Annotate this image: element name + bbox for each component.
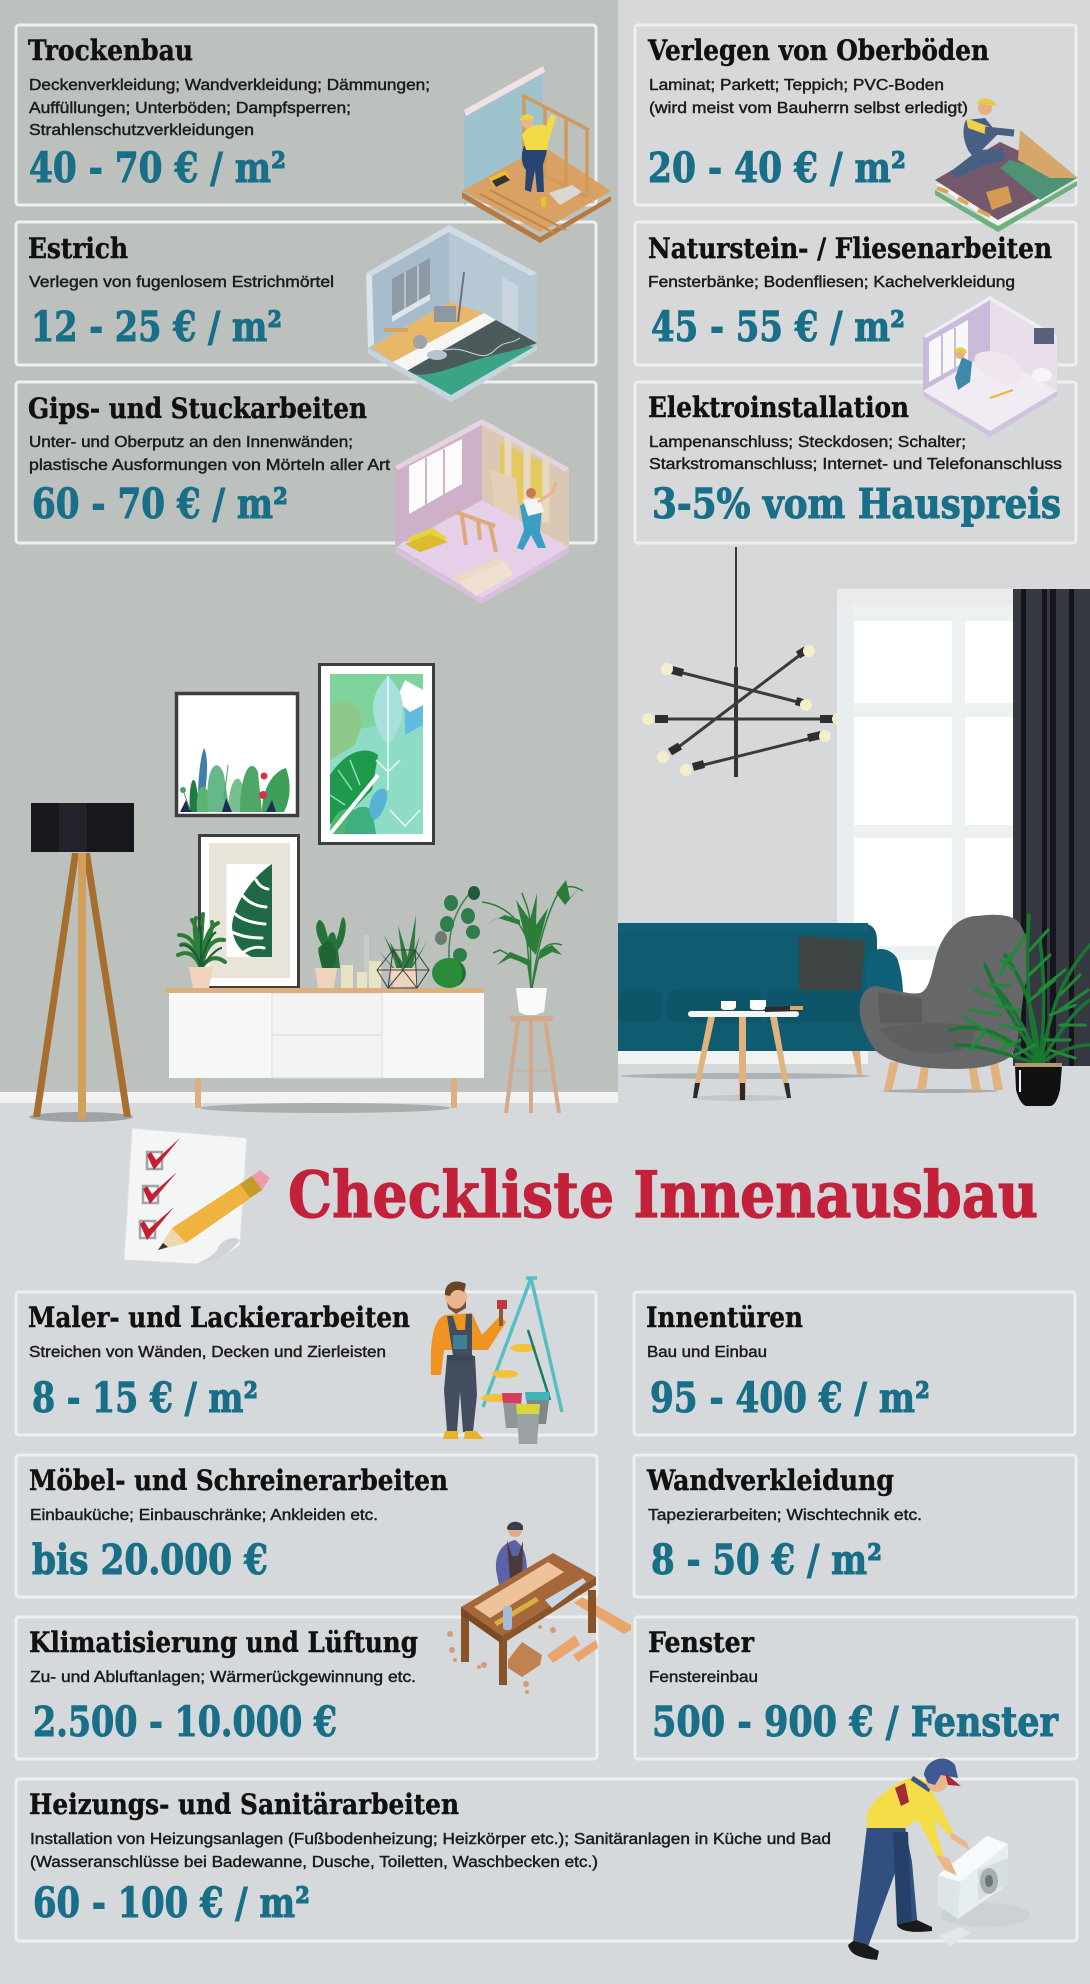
description <box>29 77 430 139</box>
heading: Trockenbau <box>28 34 193 67</box>
description <box>29 434 391 474</box>
description: Bau und Einbau <box>647 1344 767 1361</box>
heading: Heizungs- und Sanitärarbeiten <box>29 1788 459 1821</box>
panel: Trockenbau <box>16 25 596 205</box>
description: Verlegen von fugenlosem Estrichmörtel <box>29 274 334 291</box>
panel: Elektroinstallation <box>635 382 1076 543</box>
price: 60 - 70 € / m² <box>32 480 288 528</box>
description: plastische Ausformungen von Mörteln aller Art <box>29 457 391 474</box>
plant: eucalyptus in green vase <box>432 886 480 988</box>
plant: tall palm on stool <box>482 880 583 1113</box>
panel: Verlegen von Oberböden <box>635 25 1076 205</box>
heading: Naturstein- / Fliesenarbeiten <box>648 232 1052 265</box>
heading: Verlegen von Oberböden <box>647 34 989 67</box>
description: Tapezierarbeiten; Wischtechnik etc. <box>648 1507 922 1524</box>
heading: Möbel- und Schreinerarbeiten <box>29 1464 448 1497</box>
panel: Naturstein- / Fliesenarbeiten <box>635 222 1076 365</box>
icon: bathroom room <box>923 296 1057 437</box>
description: Fenstereinbau <box>649 1669 758 1686</box>
price: 8 - 50 € / m² <box>651 1536 882 1584</box>
panel: Fenster <box>635 1617 1077 1759</box>
heading: Wandverkleidung <box>646 1464 894 1497</box>
description: (wird meist vom Bauherrn selbst erledigt) <box>649 100 968 117</box>
icon: framed jungle picture <box>320 664 434 844</box>
heading: Gips- und Stuckarbeiten <box>28 392 367 425</box>
plant: cactus <box>315 917 346 988</box>
icon: screed room <box>366 225 537 402</box>
panel: Estrich <box>16 222 596 365</box>
heading: Fenster <box>648 1626 755 1659</box>
heading: Estrich <box>28 232 128 265</box>
price: 40 - 70 € / m² <box>29 144 286 192</box>
candles <box>341 935 381 988</box>
heading: Innentüren <box>646 1301 803 1334</box>
icon: floor layer <box>935 98 1078 232</box>
panel: Gips- und Stuckarbeiten <box>16 382 596 543</box>
description: Starkstromanschluss; Internet- und Telefonanschluss <box>649 456 1062 473</box>
heading: Klimatisierung und Lüftung <box>29 1626 418 1659</box>
price: bis 20.000 € <box>32 1536 268 1584</box>
icon: painter with ladder <box>431 1278 562 1444</box>
coffee table <box>688 1000 803 1101</box>
description <box>30 1831 831 1871</box>
plant: left palm pot <box>178 914 225 988</box>
price: 95 - 400 € / m² <box>650 1374 930 1422</box>
plant: succulent in geometric holder <box>377 915 429 988</box>
heading: Maler- und Lackierarbeiten <box>28 1301 410 1334</box>
panel: Möbel- und Schreinerarbeiten <box>16 1455 597 1597</box>
panel: Klimatisierung und Lüftung <box>16 1617 597 1759</box>
icon: framed plants picture <box>176 694 298 816</box>
icon: drywall worker room <box>462 66 611 243</box>
icon: checklist with pencil <box>124 1128 270 1264</box>
sideboard <box>165 988 484 1113</box>
icon: framed monstera picture <box>200 836 298 988</box>
price: 8 - 15 € / m² <box>32 1374 258 1422</box>
description: Deckenverkleidung; Wandverkleidung; Dämmungen; <box>29 77 430 94</box>
dark curtain <box>1013 589 1090 1066</box>
description: Zu- und Abluftanlagen; Wärmerückgewinnung etc. <box>30 1669 416 1686</box>
panel: Wandverkleidung <box>634 1455 1076 1597</box>
icon: floor lamp <box>29 803 134 1122</box>
description: Unter- und Oberputz an den Innenwänden; <box>29 434 353 451</box>
icon: carpenter at workbench <box>447 1522 631 1694</box>
window with sheer curtain <box>837 589 1013 1010</box>
price: 45 - 55 € / m² <box>651 303 905 351</box>
icon: technician with air conditioner <box>848 1758 1030 1960</box>
plant: floor palm <box>950 915 1090 1106</box>
panel: Innentüren <box>634 1292 1075 1435</box>
description: Einbauküche; Einbauschränke; Ankleiden etc. <box>30 1507 378 1524</box>
description: (Wasseranschlüsse bei Badewanne, Dusche, Toiletten, Waschbecken etc.) <box>30 1854 598 1871</box>
description: Auffüllungen; Unterböden; Dampfsperren; <box>29 100 351 117</box>
heading: Elektroinstallation <box>648 391 909 424</box>
description: Streichen von Wänden, Decken und Zierleisten <box>29 1344 386 1361</box>
description: Fensterbänke; Bodenfliesen; Kachelverkleidung <box>648 274 1015 291</box>
price: 12 - 25 € / m² <box>31 303 282 351</box>
description: Laminat; Parkett; Teppich; PVC-Boden <box>649 77 944 94</box>
chandelier <box>642 547 844 777</box>
price: 2.500 - 10.000 € <box>33 1698 337 1746</box>
armchair <box>860 915 1029 1093</box>
sofa <box>618 923 903 1079</box>
icon: plastering room <box>395 419 569 604</box>
description: Strahlenschutzverkleidungen <box>29 122 254 139</box>
price: 60 - 100 € / m² <box>33 1879 310 1927</box>
panel: Heizungs- und Sanitärarbeiten <box>16 1779 1077 1941</box>
description <box>649 77 968 117</box>
description: Lampenanschluss; Steckdosen; Schalter; <box>649 434 966 451</box>
panel: Maler- und Lackierarbeiten <box>16 1292 596 1435</box>
price: 20 - 40 € / m² <box>648 144 906 192</box>
description <box>649 434 1062 473</box>
description: Installation von Heizungsanlagen (Fußbodenheizung; Heizkörper etc.); Sanitäranlagen in Küche und Bad <box>30 1831 831 1848</box>
